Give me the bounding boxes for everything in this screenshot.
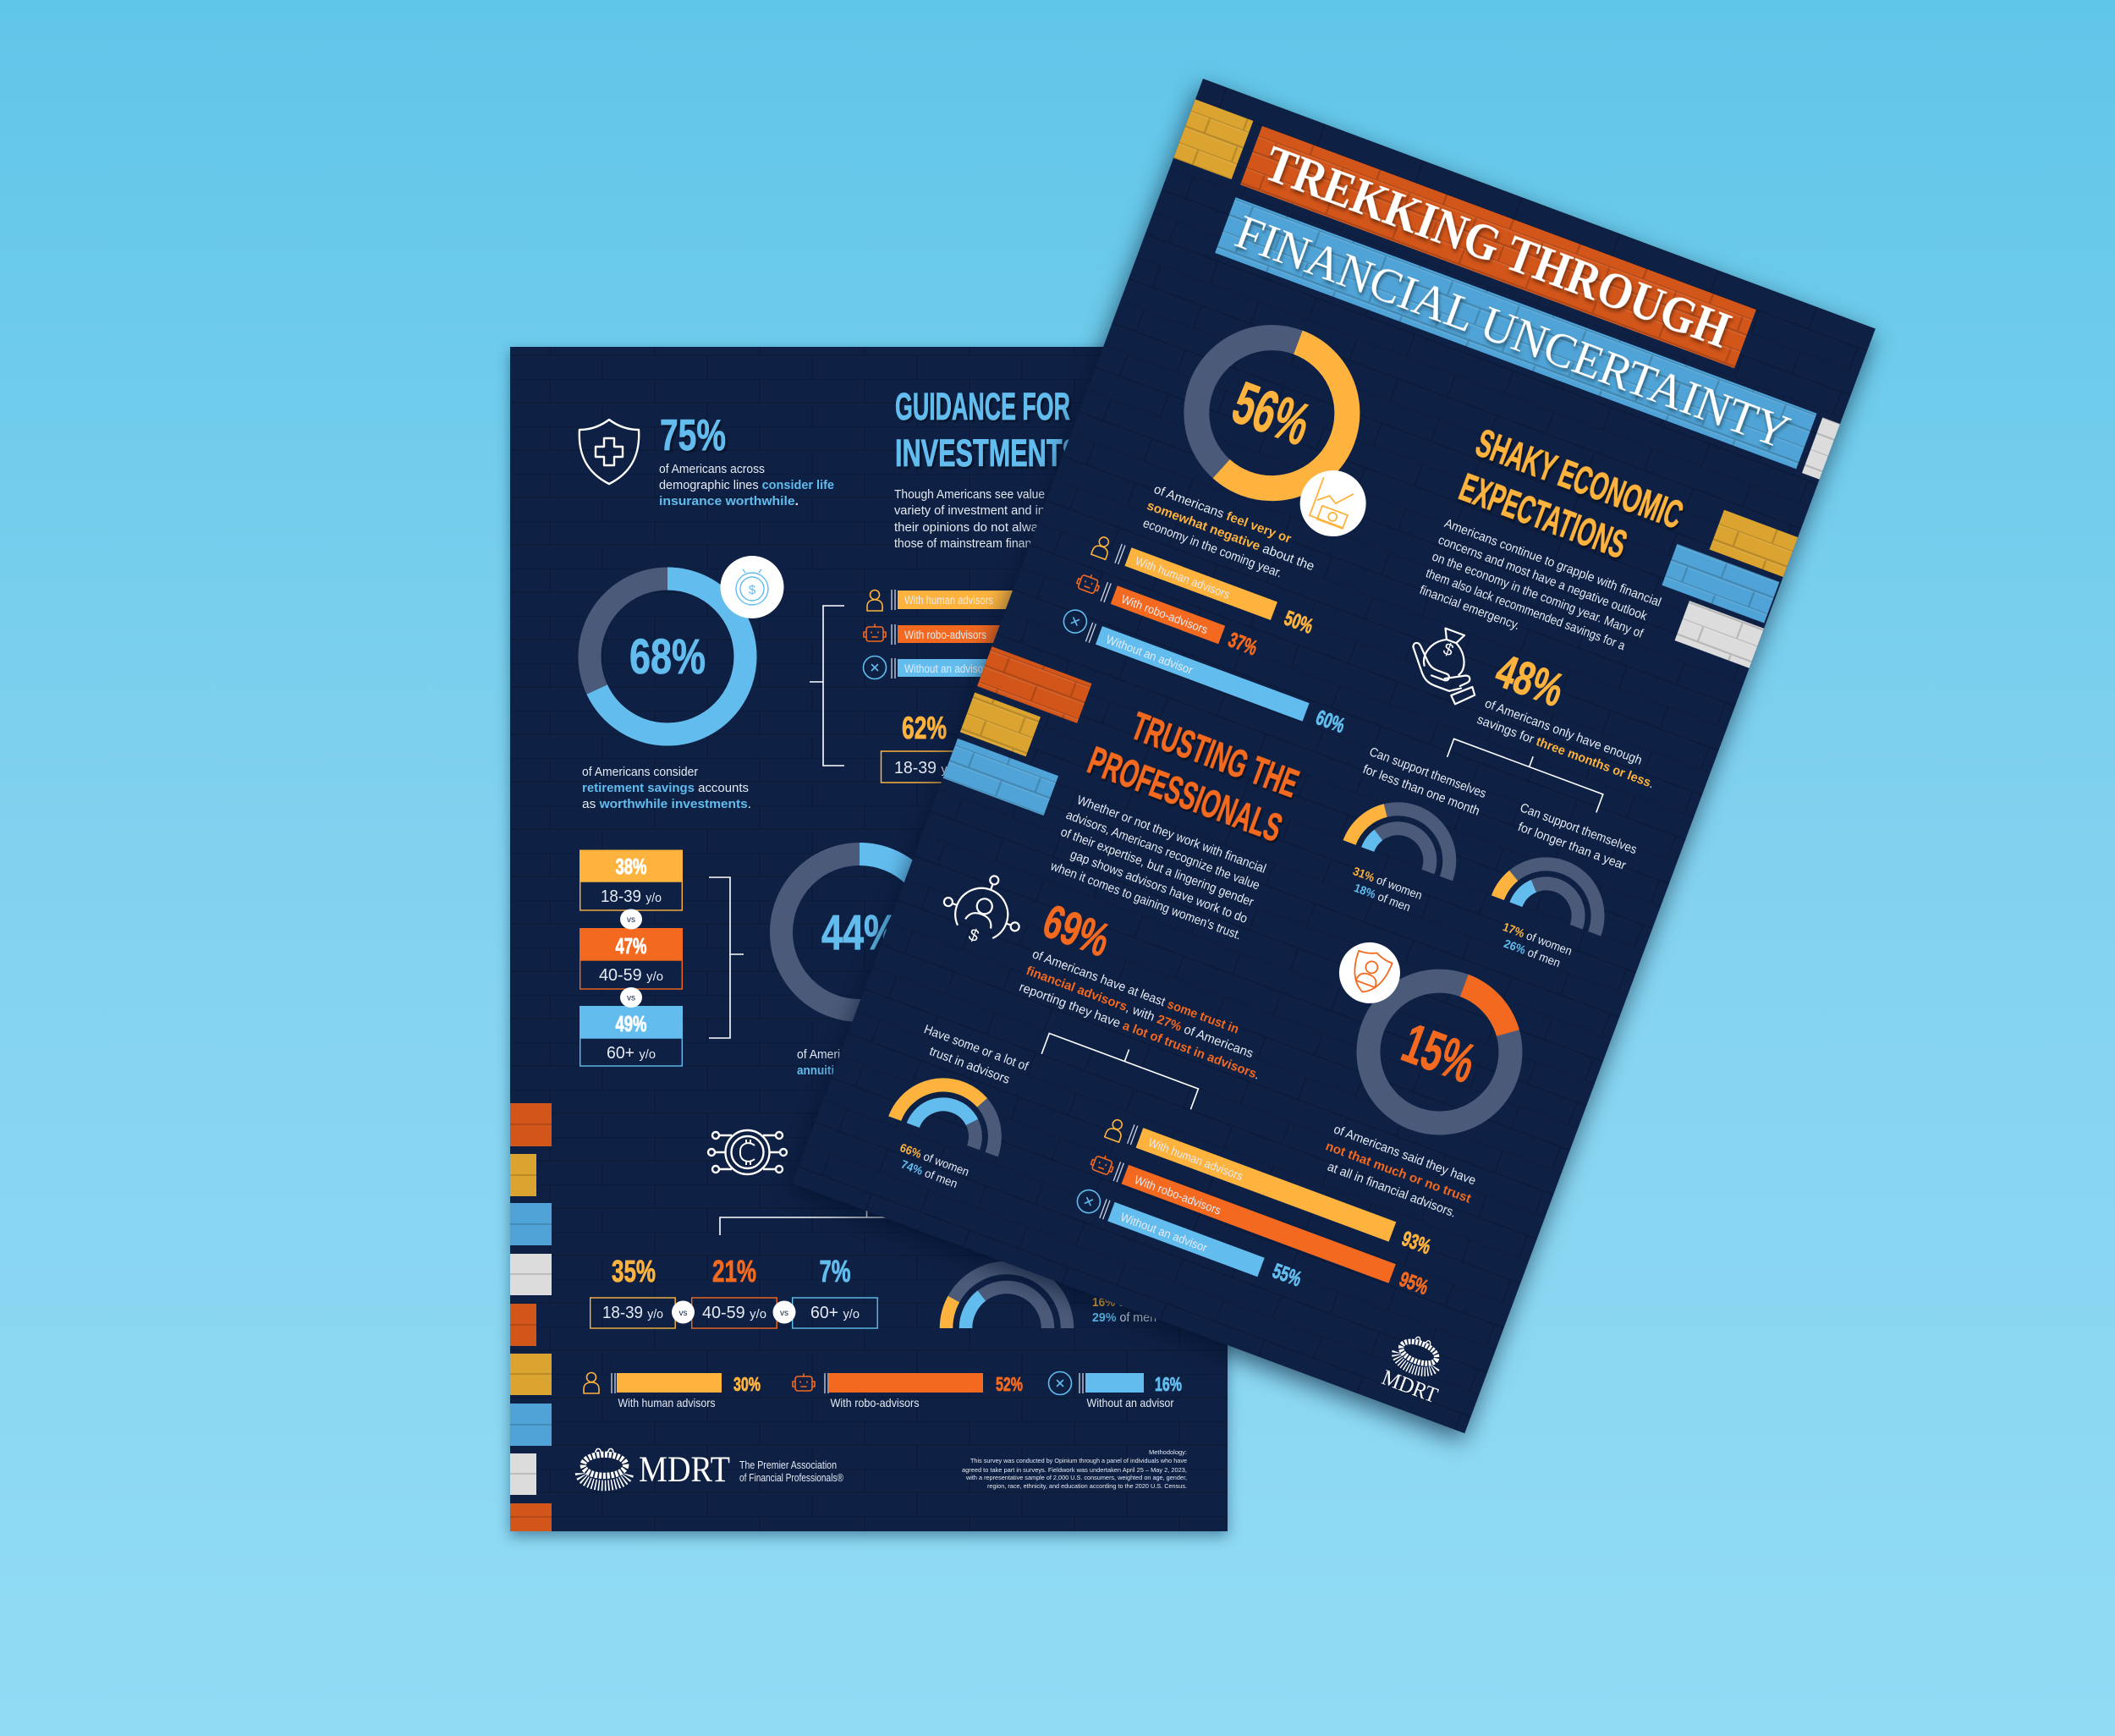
- text: savings: savings for three months or less.: [1475, 712, 1656, 791]
- age stack: vs: [627, 993, 635, 1003]
- bars: economy: 60%: [1313, 706, 1348, 738]
- text: economic paragraph: Americans continue to grapple with financial: [1442, 516, 1663, 610]
- column: longer than a year: for longer than a year: [1516, 820, 1628, 873]
- logo: MDRT: MDRT: [639, 1450, 730, 1490]
- donut 68%: 68%: [629, 629, 706, 684]
- heading: shaky economic expectations: [1454, 420, 1689, 581]
- text: trust paragraph: when it comes to gaining women's trust.: [1048, 859, 1243, 943]
- icon dollar sign: $: [1441, 640, 1456, 661]
- text: retirement savings: retirement savings accounts: [582, 781, 749, 795]
- column: some or a lot of trust: 74% of men: [899, 1157, 959, 1190]
- column: less than one month: 18% of men: [1352, 881, 1413, 914]
- side bricks: [510, 1103, 552, 1531]
- bracket: [709, 877, 744, 1038]
- age stack: vs: [627, 915, 635, 925]
- text: negative outlook: [1139, 482, 1322, 591]
- title line 1: TREKKING THROUGH: [1257, 135, 1738, 359]
- text: trust paragraph: of their expertise, but a lingering gender: [1058, 825, 1255, 909]
- bottom bars: Without an advisor: [1086, 1396, 1174, 1409]
- column: some or a lot of trust: 66% of women: [898, 1140, 971, 1178]
- text: no trust: at all in financial advisors.: [1326, 1160, 1459, 1221]
- bars: economy: 50%: [1281, 607, 1316, 639]
- text: negative outlook: somewhat negative about the: [1145, 498, 1316, 574]
- panel: back poster: [510, 347, 1228, 1531]
- icon: chart and money: [1290, 461, 1376, 546]
- heading: guidance for investments: [895, 385, 1079, 475]
- text: economic paragraph: on the economy in the coming year. Many of: [1430, 549, 1645, 641]
- bars: economy: With robo-advisors: [1119, 592, 1210, 636]
- icon: stopwatch: [721, 556, 783, 618]
- bottom bars: [584, 1372, 1182, 1409]
- age stack: 38%: [616, 854, 646, 879]
- advisor bars: [863, 590, 1075, 678]
- column: some or a lot of trust: Have some or a lot of: [922, 1022, 1030, 1074]
- column: longer than a year: Can support themselves: [1518, 800, 1639, 857]
- text: guidance paragraph: [894, 487, 1097, 551]
- bars: trust: With robo-advisors: [1133, 1173, 1223, 1217]
- column: some or a lot of trust: trust in advisors: [927, 1044, 1012, 1087]
- panel: front poster: [792, 79, 1876, 1433]
- crypto age stats: 60+ y/o: [810, 1304, 860, 1322]
- text: retirement savings: [582, 765, 751, 811]
- text: annuities: [797, 1047, 913, 1078]
- icon: stopwatch: $: [749, 583, 756, 597]
- stat 62%: 62%: [902, 711, 947, 745]
- bars: economy: Without an advisor: [1104, 632, 1195, 677]
- text: guidance paragraph: those of mainstream financial advisors: [894, 536, 1097, 551]
- crypto age stats: 18-39 y/o: [602, 1304, 663, 1322]
- bracket: [1041, 1021, 1203, 1109]
- text: arc values: 16% of women: [1092, 1295, 1168, 1310]
- bars: economy: [1058, 534, 1376, 738]
- bars: trust: 93%: [1398, 1227, 1434, 1259]
- heading: shaky economic expectations: SHAKY ECONOMIC: [1470, 420, 1689, 537]
- bars: trust: Without an advisor: [1118, 1210, 1210, 1255]
- bars: trust: 55%: [1269, 1259, 1305, 1291]
- text: some trust: of Americans have at least some trust in: [1030, 947, 1241, 1037]
- title banner orange: [1240, 126, 1756, 368]
- bars: economy: With human advisors: [1134, 554, 1232, 602]
- bottom bars: 30%: [733, 1373, 761, 1395]
- logo: MDRT: The Premier Association: [739, 1459, 837, 1471]
- text: some trust: reporting they have a lot of trust in advisors.: [1017, 980, 1261, 1083]
- text: trust paragraph: advisors, Americans recognize the value: [1064, 808, 1261, 893]
- bars: trust: [1074, 1115, 1445, 1334]
- donut 56%: [1175, 316, 1369, 510]
- text: economic paragraph: financial emergency.: [1418, 583, 1522, 633]
- left bricks: [943, 646, 1092, 816]
- icon: money bag: [1399, 620, 1493, 710]
- text: guidance paragraph: Though Americans see value: [894, 487, 1045, 502]
- text: trust paragraph: gap shows advisors have work to do: [1068, 848, 1250, 926]
- column: longer than a year: [1472, 800, 1639, 981]
- crypto age stats: vs: [780, 1309, 788, 1318]
- box 18-39: [882, 751, 966, 783]
- icon: network person: [938, 862, 1033, 946]
- bottom bars: 16%: [1155, 1373, 1182, 1395]
- logo: MDRT: MDRT: [1379, 1365, 1442, 1408]
- text: economic paragraph: them also lack recommended savings for a: [1424, 566, 1628, 653]
- text: retirement savings: of Americans consider: [582, 765, 698, 779]
- text: annuities: annuities worthwhile.: [797, 1063, 913, 1078]
- bottom bars: 52%: [996, 1373, 1023, 1395]
- age stack: 60+ y/o: [607, 1044, 656, 1063]
- text: economic paragraph: [1418, 516, 1663, 677]
- column: longer than a year: 17% of women: [1501, 920, 1574, 958]
- text: methodology: with a representative sample of 2,000 U.S. consumers, weighted on age, gender,: [965, 1474, 1187, 1481]
- icon dollar sign: $: [966, 926, 981, 946]
- crypto age stats: 7%: [819, 1254, 851, 1288]
- bottom bars: With robo-advisors: [831, 1396, 919, 1409]
- column: less than one month: Can support themselves: [1367, 744, 1488, 801]
- heading: trusting the professionals: PROFESSIONALS: [1082, 738, 1288, 850]
- stat 75%: 75%: [660, 411, 726, 460]
- crypto age stats: 40-59 y/o: [702, 1304, 766, 1322]
- text: guidance paragraph: variety of investment and insurance: [894, 503, 1089, 518]
- donut 44%: 44%: [821, 905, 898, 960]
- logo: MDRT: [580, 1448, 843, 1490]
- donut 68%: [590, 579, 745, 734]
- donut 56%: 56%: [1224, 370, 1319, 459]
- heading: shaky economic expectations: EXPECTATIONS: [1454, 464, 1633, 567]
- column: less than one month: [1321, 744, 1488, 925]
- advisor bars: With human advisors: [904, 594, 993, 607]
- text: no trust: not that much or no trust: [1324, 1139, 1473, 1206]
- icon: shield: [580, 420, 639, 484]
- text: trust paragraph: Whether or not they work with financial: [1075, 793, 1268, 876]
- text: methodology: [962, 1448, 1187, 1490]
- text: life insurance: of Americans across: [659, 462, 765, 476]
- donut 15%: [1348, 961, 1530, 1144]
- text: life insurance: demographic lines consider life: [659, 478, 834, 492]
- column: some or a lot of trust: [876, 1022, 1030, 1200]
- heading: guidance for investments: GUIDANCE FOR: [895, 385, 1070, 428]
- logo: MDRT: [1379, 1330, 1454, 1408]
- bars: trust: With human advisors: [1146, 1135, 1244, 1183]
- heading: trusting the professionals: [1082, 694, 1305, 850]
- title line 2: FINANCIAL UNCERTAINTY: [1228, 206, 1797, 459]
- text: life insurance: insurance worthwhile .: [659, 494, 799, 508]
- logo: MDRT: of Financial Professionals®: [739, 1471, 843, 1484]
- text: savings: of Americans only have enough: [1483, 696, 1644, 768]
- stat 48%: 48%: [1489, 643, 1571, 717]
- column: less than one month: 31% of women: [1351, 864, 1424, 902]
- text: no trust: [1317, 1122, 1480, 1223]
- column: less than one month: for less than one month: [1361, 762, 1481, 819]
- icon: person badge: [1331, 934, 1409, 1012]
- text: negative outlook: economy in the coming year.: [1141, 516, 1284, 581]
- poster sheet: [792, 79, 1876, 1433]
- text: methodology: Methodology:: [1149, 1448, 1187, 1456]
- crypto age stats: 35%: [612, 1254, 656, 1288]
- text: arc values: 29% of men: [1092, 1310, 1156, 1325]
- text: methodology: agreed to take part in surveys. Fieldwork was undertaken April 25 – May 2, 2023,: [962, 1466, 1187, 1474]
- top left brick: [1173, 99, 1253, 179]
- heading: guidance for investments: INVESTMENTS: [895, 431, 1079, 475]
- advisor bars: Without an advisor: [904, 662, 986, 675]
- column: longer than a year: 26% of men: [1502, 937, 1563, 970]
- text: methodology: This survey was conducted by Opinium through a panel of individuals who have: [970, 1457, 1187, 1464]
- bars: economy: 37%: [1225, 628, 1261, 660]
- donut 44%: [782, 854, 937, 1010]
- text: no trust: of Americans said they have: [1332, 1122, 1478, 1188]
- crypto age stats: 21%: [712, 1254, 756, 1288]
- title banner blue: [1215, 197, 1817, 469]
- right bricks: [1645, 385, 1840, 668]
- age stack: 18-39 y/o: [601, 887, 662, 906]
- age stack: 40-59 y/o: [599, 966, 663, 985]
- text: negative outlook: of Americans feel very or: [1151, 482, 1294, 547]
- bottom bars: With human advisors: [618, 1396, 716, 1409]
- icon: crypto: [708, 1130, 787, 1174]
- bracket: [810, 606, 844, 766]
- heading: trusting the professionals: TRUSTING THE: [1126, 704, 1305, 805]
- text: economic paragraph: concerns and most have a negative outlook: [1437, 533, 1650, 624]
- text: guidance paragraph: their opinions do not always match: [894, 520, 1089, 535]
- bracket: [720, 1210, 1013, 1235]
- text: arc values: [1092, 1295, 1168, 1325]
- text: methodology: region, race, ethnicity, and education according to the 2020 U.S. Census.: [987, 1482, 1187, 1490]
- crypto age stats: [591, 1254, 877, 1328]
- text: trust paragraph: [1046, 791, 1268, 943]
- age stack: 49%: [616, 1011, 646, 1036]
- age stack: [580, 849, 683, 1066]
- donut 15%: 15%: [1394, 1011, 1484, 1095]
- text: retirement savings: as worthwhile investments .: [582, 797, 751, 811]
- arc chart: back: [946, 1267, 1068, 1328]
- crypto age stats: vs: [678, 1309, 687, 1318]
- box 18-39: 18-39 y/o: [894, 759, 958, 777]
- advisor bars: With robo-advisors: [904, 629, 986, 641]
- poster sheet: [510, 347, 1228, 1531]
- text: life insurance: [659, 462, 834, 508]
- text: some trust: financial advisors, with 27% of Americans: [1025, 964, 1255, 1061]
- bars: trust: 95%: [1396, 1267, 1431, 1299]
- stat 69%: 69%: [1036, 893, 1117, 967]
- age stack: 47%: [616, 933, 646, 959]
- bracket: [1448, 728, 1607, 812]
- text: annuities: of Americans consider: [797, 1047, 913, 1062]
